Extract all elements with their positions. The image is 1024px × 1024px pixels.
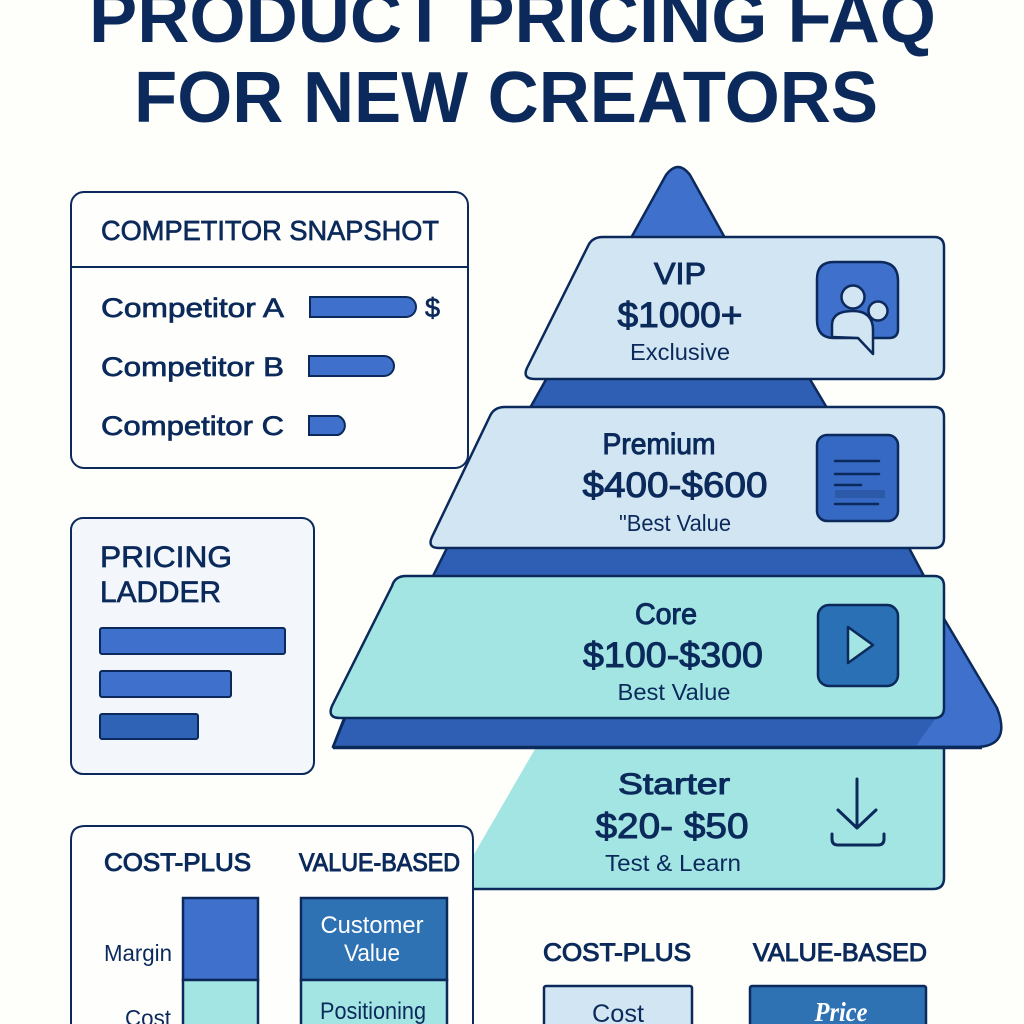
row: competitor A (101, 293, 440, 323)
icon: document (817, 435, 898, 521)
heading: cost-plus: COST-PLUS (104, 849, 251, 877)
starter text: Starter (618, 768, 730, 801)
label: margin: Margin (104, 940, 172, 966)
starter text (596, 768, 748, 876)
cost-plus stack (183, 898, 258, 1024)
icon: download (832, 779, 884, 845)
value-based stack: Customer (320, 912, 424, 939)
comparison: cost-plus (543, 939, 692, 1024)
tier: VIP (526, 237, 944, 379)
core text: Core (635, 598, 697, 631)
row: competitor A: Competitor A (101, 293, 284, 323)
panel: pricing models comparison (71, 826, 473, 1024)
pyramid background (333, 167, 1001, 747)
title (89, 0, 936, 138)
row: competitor B (101, 352, 394, 382)
panel: competitor snapshot (71, 192, 468, 468)
icon: play (818, 605, 898, 686)
row: competitor C: Competitor C (101, 411, 284, 441)
VIP text: $1000+ (618, 296, 742, 335)
starter text: Test & Learn (605, 850, 741, 876)
heading: value-based: VALUE-BASED (299, 849, 460, 877)
core text (583, 598, 763, 705)
VIP text: VIP (654, 256, 706, 291)
heading: pricing ladder (100, 541, 232, 609)
tier: premium (431, 407, 944, 548)
ladder bars (100, 628, 285, 739)
core text: Best Value (618, 679, 730, 705)
heading: competitor snapshot: COMPETITOR SNAPSHOT (101, 215, 439, 246)
premium text: $400-$600 (582, 466, 768, 505)
comparison: value-based: VALUE-BASED (753, 939, 927, 967)
value-based stack (301, 898, 447, 1024)
title: FOR NEW CREATORS (134, 58, 878, 138)
row: competitor C (101, 411, 345, 441)
comparison: cost-plus: COST-PLUS (543, 939, 691, 967)
tier: starter (333, 748, 982, 889)
starter text: $20- $50 (596, 807, 748, 846)
heading: pricing ladder: LADDER (100, 576, 221, 609)
row: competitor B: Competitor B (101, 352, 284, 382)
premium text: Premium (602, 428, 716, 461)
premium text (582, 428, 768, 536)
icon: community (817, 262, 898, 354)
tier: core (331, 576, 944, 718)
VIP text (618, 256, 742, 365)
comparison: value-based (750, 939, 927, 1024)
heading: pricing ladder: PRICING (100, 541, 232, 574)
value-based stack: Value (344, 940, 400, 967)
panel: pricing ladder (71, 518, 314, 774)
VIP text: Exclusive (630, 339, 730, 365)
premium text: "Best Value (619, 510, 731, 536)
row: competitor A: $ (425, 293, 440, 323)
core text: $100-$300 (583, 636, 763, 675)
